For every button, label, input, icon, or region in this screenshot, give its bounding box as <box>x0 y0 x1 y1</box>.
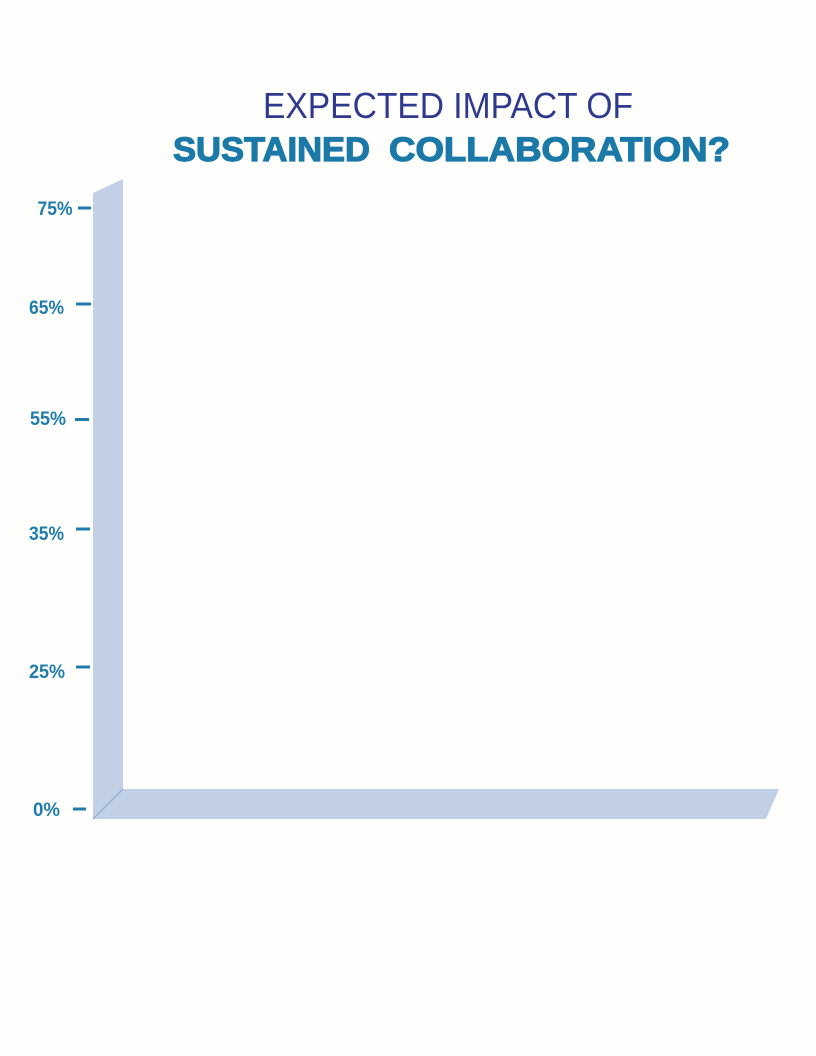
25% label: 25% <box>29 661 65 683</box>
35% label <box>29 523 90 545</box>
0% label <box>33 799 86 821</box>
horizontal axis floor <box>93 789 779 819</box>
75% label: 75% <box>38 198 72 220</box>
axis corner line <box>93 789 123 819</box>
chart axes <box>93 179 779 819</box>
65% label: 65% <box>29 297 64 319</box>
title line 2: SUSTAINED <box>173 131 370 169</box>
55% label <box>30 408 89 430</box>
35% label: 35% <box>29 523 64 545</box>
65% label <box>29 297 91 319</box>
55% label: 55% <box>30 408 66 430</box>
vertical axis wall <box>93 179 123 819</box>
title line 2: COLLABORATION? <box>389 131 730 169</box>
25% label <box>29 661 90 683</box>
title line 1: EXPECTED IMPACT OF <box>263 85 633 126</box>
title <box>173 85 730 169</box>
y axis labels and ticks <box>29 198 91 821</box>
0% label: 0% <box>33 799 60 821</box>
